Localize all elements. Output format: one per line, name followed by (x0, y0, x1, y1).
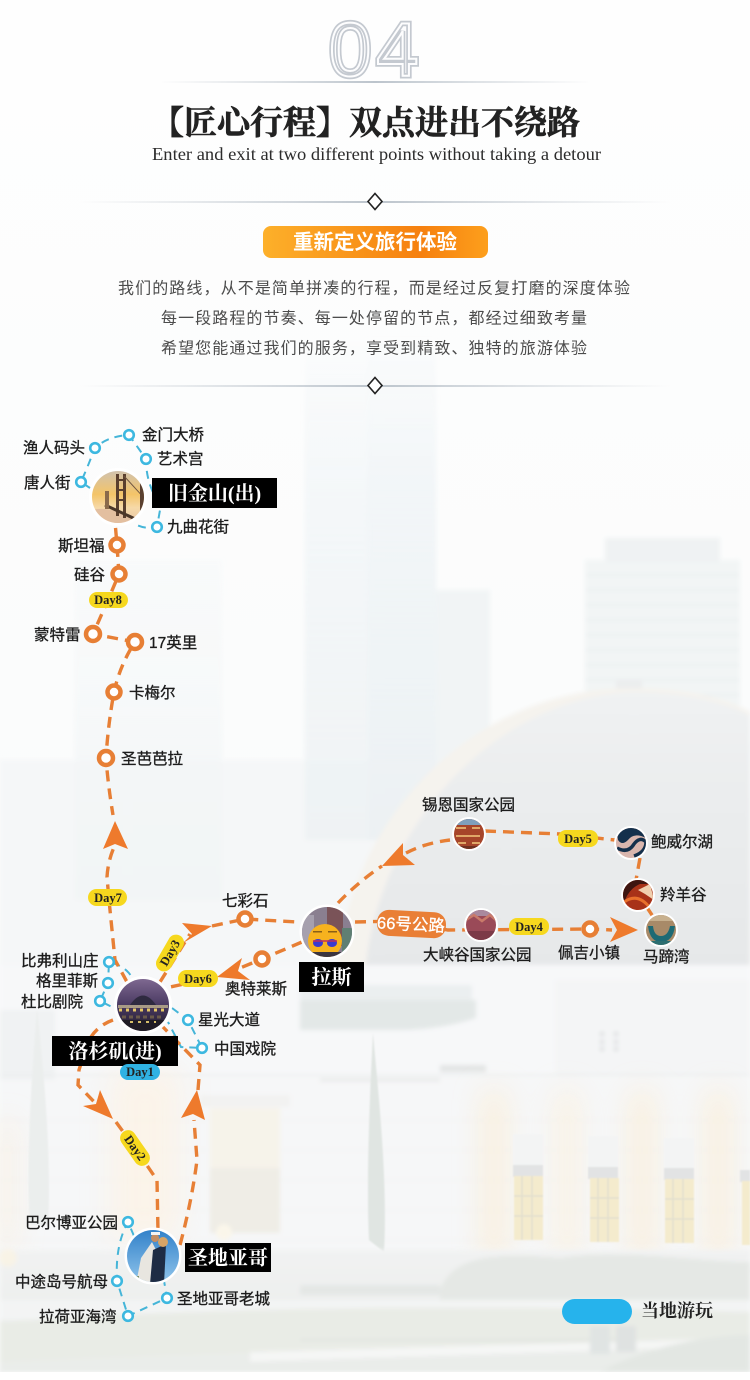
orange route: day 1 to San Diego (78, 1020, 158, 1232)
arrow: day 6 (217, 958, 250, 980)
place labels: 佩吉小镇 (558, 944, 620, 962)
orange route: day 3 (160, 919, 298, 982)
orange heading button (263, 226, 488, 258)
place labels: 渔人码头 (23, 439, 85, 457)
arrow: day 5 (382, 843, 415, 866)
place labels: 中国戏院 (214, 1039, 276, 1058)
place labels: 圣芭芭拉 (121, 750, 183, 768)
badge: Day 7 (88, 889, 127, 906)
badge: Day 8 (89, 592, 128, 608)
city label: Las Vegas: 拉斯 (312, 966, 352, 989)
place labels: 杜比剧院 (21, 992, 83, 1011)
place labels: 格里菲斯 (36, 972, 98, 990)
badge: Day 5: Day5 (564, 832, 592, 846)
divider with diamond (80, 378, 670, 394)
arrow: return (181, 1090, 205, 1120)
badge: Day 2 (117, 1127, 153, 1169)
place labels: 大峡谷国家公园 (423, 946, 532, 964)
place labels: 比弗利山庄 (21, 952, 99, 970)
place labels: 马蹄湾 (643, 948, 690, 966)
city label: Los Angeles (52, 1036, 178, 1066)
badge: Route 66: 66号公路 (377, 913, 446, 936)
place labels: 七彩石 (222, 892, 269, 910)
city label: San Francisco: 旧金山(出) (168, 482, 261, 505)
badge: Day 1: Day1 (126, 1065, 154, 1079)
photo: Lake Powell (614, 826, 648, 860)
badge: Day 8: Day8 (94, 593, 122, 607)
city label: Los Angeles: 洛杉矶(进) (68, 1040, 162, 1063)
place labels: 拉荷亚海湾 (39, 1308, 117, 1326)
photo: Las Vegas with emoji (300, 904, 354, 960)
blue stop markers (76, 430, 207, 1321)
badge: Day 1 (120, 1064, 160, 1080)
day badges (88, 592, 598, 1169)
place labels: 星光大道 (198, 1011, 260, 1029)
place labels: 蒙特雷 (34, 626, 81, 644)
badge: Day 3: Day3 (157, 937, 183, 969)
place labels: 圣地亚哥老城 (177, 1290, 271, 1308)
place labels: 中途岛号航母 (15, 1273, 108, 1291)
orange route: day 5 return (338, 831, 654, 918)
badge: Day 5 (558, 830, 598, 847)
badge: Day 4 (509, 918, 549, 935)
orange heading button: 重新定义旅行体验 (293, 230, 457, 254)
blue route: Los Angeles local (100, 962, 202, 1048)
place labels: 九曲花街 (167, 518, 229, 536)
badge: Day 7: Day7 (94, 891, 122, 905)
photo: Zion (452, 817, 486, 852)
photo: Los Angeles observatory (117, 979, 172, 1031)
place labels: 斯坦福 (58, 537, 105, 555)
subtitle: Enter and exit at two different points without taking a detour (152, 144, 601, 164)
place labels: 奥特莱斯 (225, 980, 287, 998)
blue route: San Diego local (117, 1222, 167, 1316)
city label: San Francisco (152, 478, 277, 508)
divider with diamond (80, 194, 670, 210)
photo: San Diego statue (124, 1228, 182, 1284)
section number 04: 04 (329, 8, 424, 93)
city label: San Diego: 圣地亚哥 (188, 1246, 268, 1270)
intro paragraph: 希望您能通过我们的服务，享受到精致、独特的旅游体验 (161, 340, 587, 358)
place labels: 金门大桥 (142, 426, 205, 444)
orange route: north coast (93, 510, 135, 815)
badge: Day 3 (153, 932, 187, 974)
place labels: 羚羊谷 (660, 886, 707, 904)
photo: Grand Canyon (464, 908, 498, 942)
section number 04 (329, 20, 419, 80)
orange route: day 6 (170, 942, 302, 987)
badge: Day 4: Day4 (515, 920, 544, 934)
orange route: day 7 (107, 845, 127, 982)
arrow: north (103, 821, 128, 849)
place labels (15, 426, 713, 1326)
top divider (160, 81, 590, 83)
place labels: 艺术宫 (157, 450, 204, 468)
intro paragraph: 我们的路线，从不是简单拼凑的行程，而是经过反复打磨的深度体验 (118, 280, 630, 298)
intro paragraph: 每一段路程的节奏、每一处停留的节点，都经过细致考量 (161, 310, 587, 328)
badge: Day 6: Day6 (184, 972, 212, 986)
orange route: route 66 (355, 921, 612, 930)
place labels: 17英里 (149, 634, 197, 652)
section number 04: 04 (329, 8, 424, 93)
legend (562, 1299, 713, 1324)
photo: Horseshoe Bend (644, 913, 678, 949)
route map (78, 435, 654, 1316)
place labels: 硅谷 (74, 566, 105, 584)
place labels: 唐人街 (24, 474, 71, 492)
place labels: 卡梅尔 (129, 684, 176, 702)
place labels: 巴尔博亚公园 (25, 1214, 118, 1232)
blue route: San Francisco local (81, 435, 160, 528)
arrow: route 66 (610, 917, 638, 942)
badge: Day 6 (178, 970, 218, 987)
arrow: day 1 (83, 1090, 113, 1119)
place labels: 鲍威尔湖 (651, 833, 713, 851)
badge: Day 2: Day2 (121, 1133, 149, 1163)
title: 【匠心行程】双点进出不绕路 (151, 105, 580, 142)
photo: Golden Gate (92, 471, 144, 523)
photo: Antelope Canyon (621, 878, 655, 912)
place labels: 锡恩国家公园 (422, 796, 515, 814)
intro paragraph (118, 280, 630, 358)
arrow: day 3 (182, 923, 212, 943)
city label: Las Vegas (299, 962, 364, 992)
orange route: return to Los Angeles (163, 1027, 200, 1245)
orange stop markers (86, 538, 596, 966)
legend: 当地游玩 (641, 1301, 713, 1321)
